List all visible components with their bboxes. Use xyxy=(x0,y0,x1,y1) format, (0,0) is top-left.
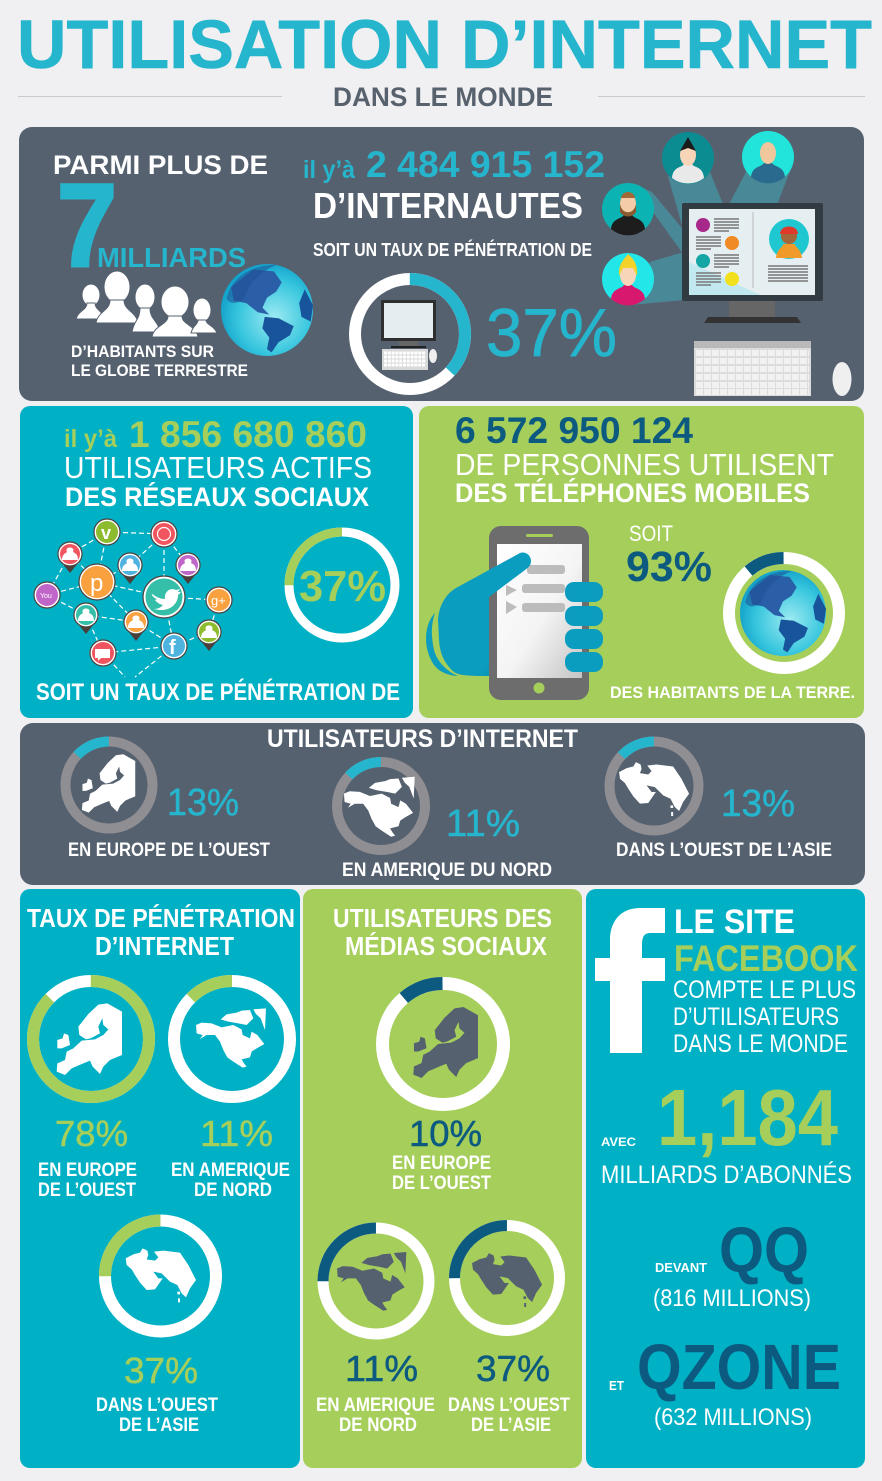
stat: north america 11 percent: DE NORD xyxy=(339,1415,417,1436)
heading xyxy=(333,903,552,961)
stat: western europe 10 percent: 10% xyxy=(409,1113,482,1154)
text: habitants: D’HABITANTS SUR xyxy=(71,342,214,361)
heading xyxy=(27,903,295,961)
stat: facebook subscribers xyxy=(601,1073,852,1189)
stat: western asia: 13% xyxy=(721,783,795,825)
avatar: bald man xyxy=(742,131,794,183)
monitor xyxy=(682,203,823,323)
heading: le site facebook: LE SITE xyxy=(674,903,795,941)
stat: western europe: EN EUROPE DE L’OUEST xyxy=(68,840,270,861)
stat: western asia 37 percent: 37% xyxy=(124,1350,198,1391)
network diagram of social icons: You xyxy=(40,593,52,600)
panel: social network users xyxy=(20,406,413,718)
network diagram of social icons: g+ xyxy=(211,593,226,608)
stat: facebook subscribers: MILLIARDS D’ABONNÉS xyxy=(601,1160,852,1189)
text: most users: D’UTILISATEURS xyxy=(673,1003,839,1031)
network diagram of social icons: f xyxy=(169,637,176,659)
stat: facebook subscribers: 1,184 xyxy=(657,1073,838,1162)
stat: western europe 10 percent xyxy=(358,959,528,1194)
panel: social media users xyxy=(303,889,582,1468)
stat: north america 11 percent: EN AMERIQUE xyxy=(171,1160,290,1181)
stat: north america 11 percent xyxy=(150,957,314,1201)
text: penetration rate: SOIT UN TAUX DE PÉNÉTRATION DE xyxy=(36,678,400,706)
donut chart: 37 percent with computer xyxy=(355,279,465,389)
caption: earth inhabitants: DES HABITANTS DE LA TERRE. xyxy=(610,683,855,702)
text: habitants xyxy=(71,342,248,380)
avatar: bearded man xyxy=(602,183,654,235)
stat: western asia 37 percent: DANS L’OUEST xyxy=(96,1395,218,1416)
panel: internet users by region xyxy=(20,723,865,885)
stat: qq: DEVANT xyxy=(655,1260,707,1275)
network diagram of social icons xyxy=(34,519,232,677)
text: most users xyxy=(673,976,856,1058)
stat: western asia: DANS L’OUEST DE L’ASIE xyxy=(616,840,832,861)
icon: crowd of people xyxy=(76,271,217,337)
social users count: il y’à xyxy=(64,425,117,453)
heading: people using: DE PERSONNES UTILISENT xyxy=(455,447,834,482)
stat: qzone: ET xyxy=(609,1378,624,1393)
stat: qq xyxy=(653,1214,811,1312)
subtitle: DANS LE MONDE xyxy=(333,82,553,112)
text: soit: SOIT xyxy=(629,521,673,546)
stat: qzone xyxy=(609,1331,841,1431)
mobile users count: 6 572 950 124 xyxy=(455,410,693,451)
heading: le site facebook: FACEBOOK xyxy=(674,938,858,979)
stat: western europe 78 percent: DE L’OUEST xyxy=(38,1180,136,1201)
donut chart: 93 percent with globe xyxy=(707,536,861,690)
heading: internautes: D’INTERNAUTES xyxy=(313,185,583,226)
panel: world population and internet users xyxy=(19,127,864,401)
donut chart: 37 percent social: 37% xyxy=(299,562,386,611)
stat: western europe 78 percent: 78% xyxy=(55,1113,128,1154)
percentage 37: 37% xyxy=(486,295,617,371)
icon: facebook f xyxy=(595,908,665,1053)
panel: facebook and rivals xyxy=(586,889,865,1468)
illustration: avatars beaming to monitor xyxy=(602,131,823,323)
avatar: blonde woman xyxy=(602,253,654,305)
stat: western europe 10 percent: DE L’OUEST xyxy=(392,1173,491,1194)
stat: facebook subscribers: AVEC xyxy=(601,1135,636,1149)
avatar: man with topknot xyxy=(662,132,714,184)
stat: western europe 78 percent: EN EUROPE xyxy=(38,1160,137,1181)
stat: western europe xyxy=(48,724,270,861)
network diagram of social icons: v xyxy=(101,523,111,543)
heading: UTILISATEURS D’INTERNET xyxy=(267,725,578,753)
stat: western europe 10 percent: EN EUROPE xyxy=(392,1153,491,1174)
text: most users: DANS LE MONDE xyxy=(673,1030,848,1058)
stat: qzone: (632 MILLIONS) xyxy=(654,1404,812,1431)
text: penetration rate: SOIT UN TAUX DE PÉNÉTRATION DE xyxy=(313,239,592,260)
panel: internet penetration rate xyxy=(20,889,314,1468)
heading: D’INTERNET xyxy=(95,931,234,961)
icon: mouse xyxy=(832,362,852,396)
stat: north america: EN AMERIQUE DU NORD xyxy=(342,860,552,881)
heading: social networks: DES RÉSEAUX SOCIAUX xyxy=(65,481,369,512)
text: habitants: LE GLOBE TERRESTRE xyxy=(71,361,248,380)
stat: north america 11 percent: 11% xyxy=(200,1113,273,1154)
stat: qq: QQ xyxy=(719,1214,809,1286)
stat: western asia xyxy=(591,723,832,861)
stat: qzone: QZONE xyxy=(637,1331,841,1403)
stat: western europe 78 percent xyxy=(33,981,149,1201)
stat: north america 11 percent: DE NORD xyxy=(194,1180,272,1201)
stat: western asia 37 percent: DANS L’OUEST xyxy=(448,1395,570,1416)
heading: active users: UTILISATEURS ACTIFS xyxy=(64,450,372,485)
heading: parmi plus de: PARMI PLUS DE xyxy=(53,150,268,180)
icon: globe xyxy=(221,264,313,356)
milliards label: MILLIARDS xyxy=(97,242,246,273)
network diagram of social icons: p xyxy=(90,570,103,597)
heading: MÉDIAS SOCIAUX xyxy=(345,931,548,961)
stat: north america 11 percent: EN AMERIQUE xyxy=(316,1395,435,1416)
heading: UTILISATEURS DES xyxy=(333,903,552,933)
stat: north america xyxy=(319,744,552,881)
stat: western asia 37 percent: 37% xyxy=(476,1348,550,1389)
illustration: hand holding phone xyxy=(426,526,603,700)
stat: north america: 11% xyxy=(446,803,520,845)
donut chart: 37 percent social xyxy=(289,532,395,638)
stat: western europe: 13% xyxy=(167,782,239,824)
stat: north america 11 percent: 11% xyxy=(345,1348,418,1389)
icon: keyboard xyxy=(694,341,811,396)
internet users count: 2 484 915 152 xyxy=(366,144,605,185)
heading: mobile phones: DES TÉLÉPHONES MOBILES xyxy=(455,477,810,508)
title: UTILISATION D’INTERNET xyxy=(17,6,872,83)
stat: western asia 37 percent: DE L’ASIE xyxy=(119,1415,199,1436)
social users count: 1 856 680 860 xyxy=(129,414,367,455)
stat: qq: (816 MILLIONS) xyxy=(653,1285,811,1312)
stat: western asia 37 percent: DE L’ASIE xyxy=(471,1415,551,1436)
stat: western asia 37 percent xyxy=(448,1226,570,1436)
heading: le site facebook xyxy=(674,903,858,979)
stat: north america 11 percent xyxy=(316,1228,435,1436)
big number 7: 7 xyxy=(57,160,117,292)
internet users count: il y’à xyxy=(303,156,355,184)
heading: TAUX DE PÉNÉTRATION xyxy=(27,903,295,933)
percentage 93: 93% xyxy=(626,543,712,591)
stat: western asia 37 percent xyxy=(96,1220,218,1436)
panel: mobile phone users xyxy=(419,406,864,718)
